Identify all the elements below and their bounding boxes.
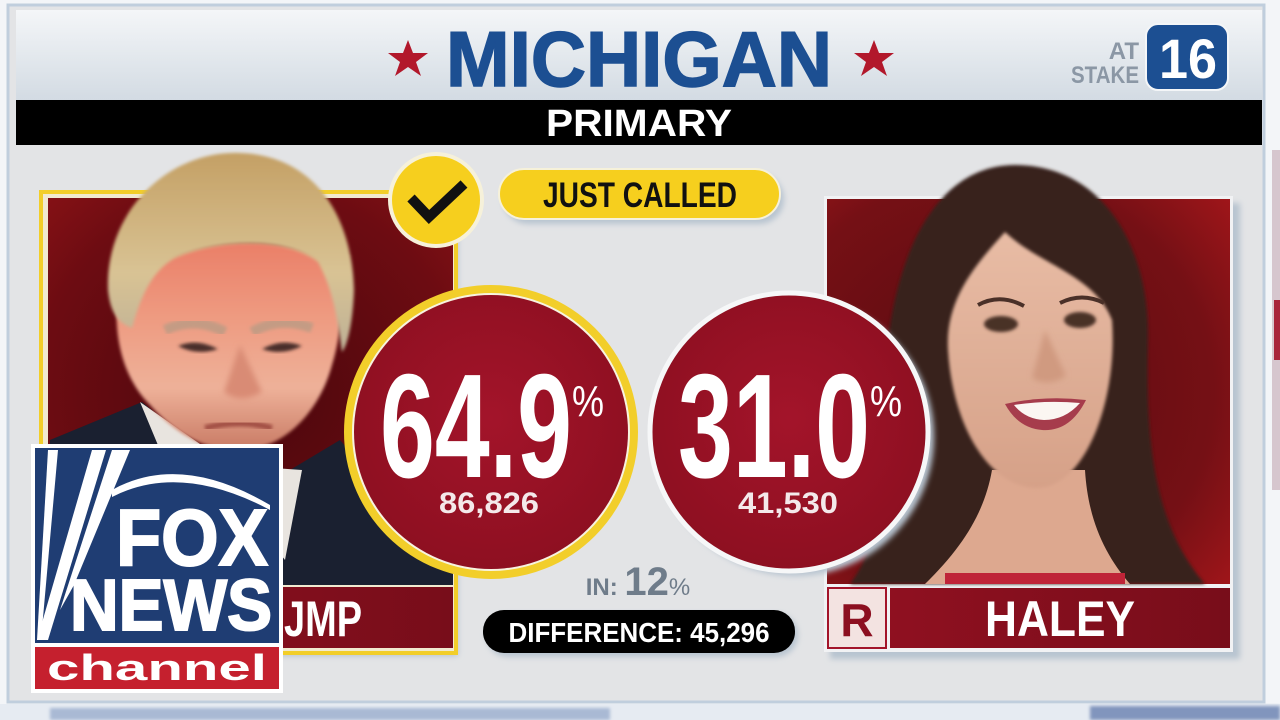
name bar: [890, 588, 1230, 648]
name bar: [48, 587, 453, 648]
header band: [16, 10, 1262, 103]
title: MICHIGAN: [446, 15, 832, 103]
votes: 86,826: [439, 487, 539, 520]
result circle: Haley: [650, 293, 934, 576]
votes: 41,530: [738, 487, 838, 520]
percentage: 31.0: [678, 344, 870, 509]
panel: Trump: [41, 153, 458, 656]
panel: Haley: [824, 165, 1240, 659]
photo: Trump portrait: [50, 153, 453, 585]
precincts in: IN: 12%: [586, 560, 690, 604]
difference pill: [483, 610, 798, 657]
at stake badge: 16: [1159, 27, 1217, 90]
photo background: [48, 198, 453, 585]
percentage: 64.9: [380, 344, 572, 509]
at stake label: STAKE: [1071, 62, 1139, 89]
photo background: [827, 199, 1230, 584]
subtitle bar: PRIMARY: [546, 103, 732, 145]
icon: left star: [388, 40, 428, 76]
logo: Fox News channel: [31, 444, 283, 693]
icon: winner check badge: [390, 154, 482, 246]
logo searchlights: [37, 450, 270, 640]
result circle: Trump: [348, 289, 634, 575]
photo: Haley portrait: [850, 165, 1205, 584]
icon: right star: [854, 40, 894, 76]
party badge: R: [840, 594, 874, 646]
name bar: HALEY: [985, 591, 1135, 647]
logo wordmark: FOX: [116, 493, 268, 582]
logo: Fox News channel: channel: [47, 647, 267, 688]
result circle: Trump: %: [572, 377, 604, 426]
party badge: [828, 588, 886, 648]
name bar: JMP: [284, 591, 362, 647]
result circle: Haley: %: [870, 377, 902, 426]
subtitle bar: [16, 100, 1262, 145]
logo: Fox News channel: NEWS: [70, 566, 272, 646]
at stake label: AT: [1109, 38, 1139, 65]
difference pill: DIFFERENCE: 45,296: [508, 617, 770, 648]
just called pill: JUST CALLED: [543, 176, 737, 215]
just called pill: [499, 169, 784, 224]
logo channel strip: [35, 647, 279, 689]
